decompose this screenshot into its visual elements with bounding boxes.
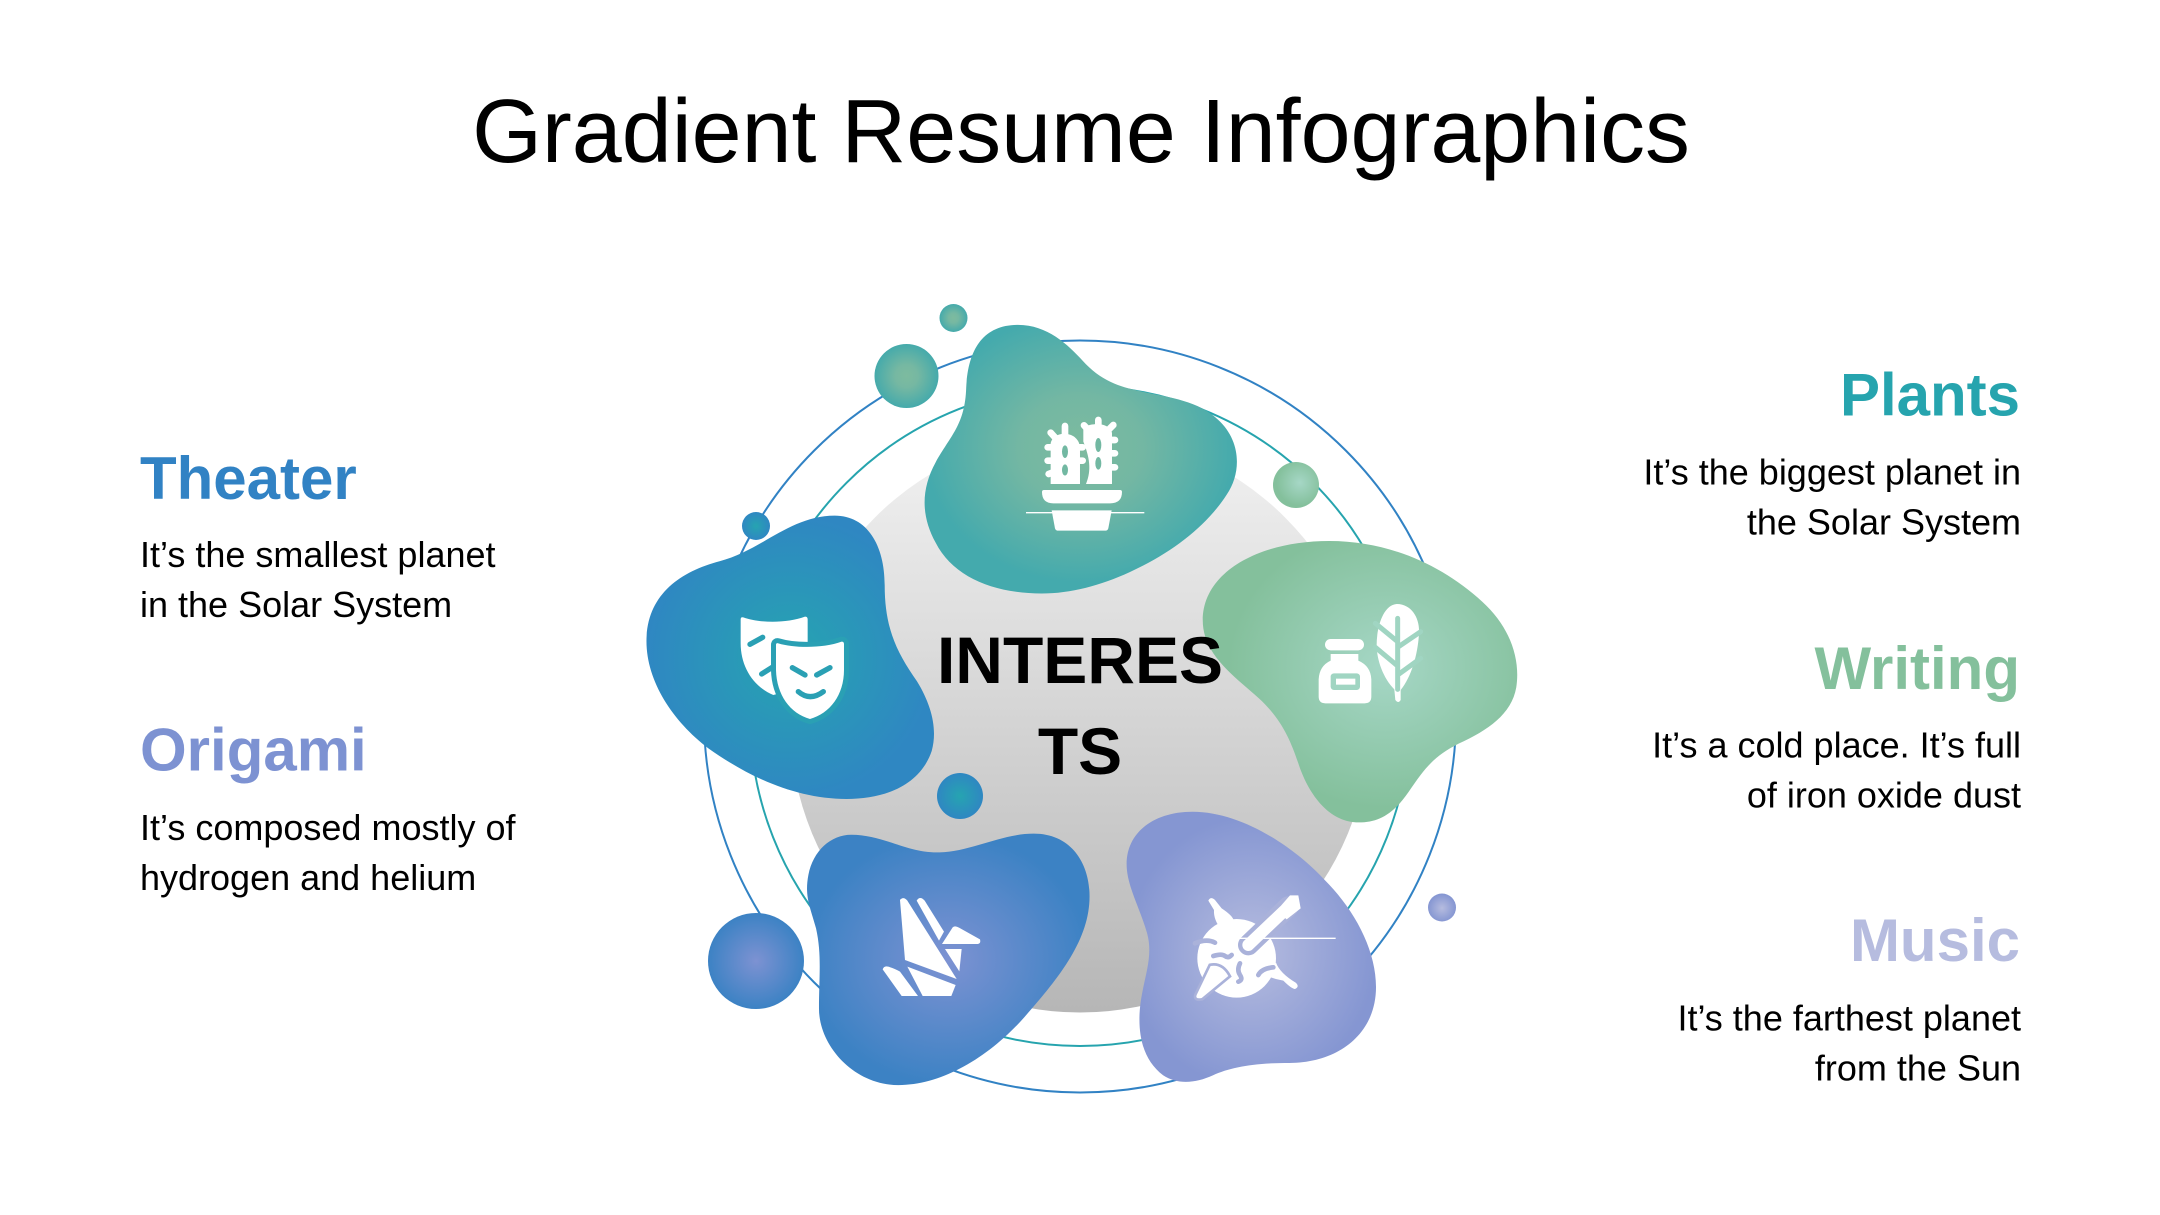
text block: music <box>1677 907 2021 1088</box>
center label: TS <box>1038 714 1122 788</box>
text block: origami: hydrogen and helium <box>140 857 476 898</box>
text block: writing: It’s a cold place. It’s full <box>1652 724 2021 766</box>
outer ring <box>704 340 1456 1092</box>
text block: plants: the Solar System <box>1747 502 2021 542</box>
text block: music: Music <box>1850 907 2020 974</box>
icon: ink bottle and quill <box>1319 604 1421 703</box>
blob: plants <box>925 325 1237 593</box>
icon: palette and brush <box>1195 895 1336 998</box>
decorative bubbles <box>708 304 1456 1009</box>
text block: writing <box>1652 635 2021 816</box>
icon: cactus <box>1026 420 1144 531</box>
text block: theater <box>140 445 496 625</box>
text block: plants: Plants <box>1840 362 2020 428</box>
text block: plants: It’s the biggest planet in <box>1643 452 2021 492</box>
text block: music: from the Sun <box>1815 1048 2021 1088</box>
blob: origami <box>807 834 1090 1085</box>
text block: music: It’s the farthest planet <box>1677 998 2021 1038</box>
grey centre disc <box>790 432 1370 1012</box>
text block: theater: It’s the smallest planet <box>140 534 496 575</box>
text block: plants <box>1643 362 2021 542</box>
title: Gradient Resume Infographics <box>472 82 1690 182</box>
text block: writing: of iron oxide dust <box>1747 774 2021 816</box>
text block: origami: It’s composed mostly of <box>140 807 516 848</box>
center label: INTERES <box>937 623 1223 697</box>
text block: origami: Origami <box>140 716 367 784</box>
icon: origami crane <box>883 898 980 996</box>
text block: theater: in the Solar System <box>140 584 452 625</box>
text block: writing: Writing <box>1814 635 2020 702</box>
text block: origami <box>140 716 516 898</box>
icon: theater masks <box>741 617 844 719</box>
text block: theater: Theater <box>140 445 357 512</box>
blob: theater <box>646 516 934 799</box>
inner ring <box>750 386 1410 1046</box>
blob: music <box>1127 812 1376 1082</box>
blob: writing <box>1203 541 1517 822</box>
